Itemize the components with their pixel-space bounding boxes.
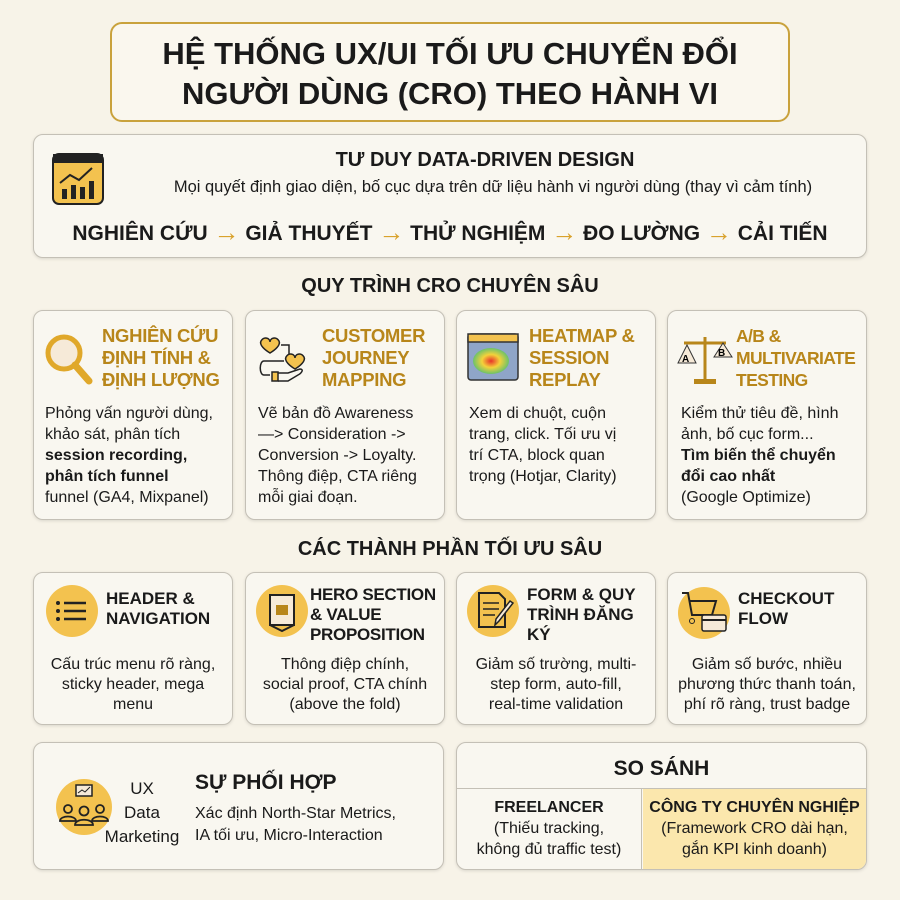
panel: nghien cuu: funnel (GA4, Mixpanel) <box>45 489 209 506</box>
panel: header navigation: menu <box>113 696 153 713</box>
panel: ab testing: đổi cao nhất <box>681 468 775 485</box>
icon: heatmap <box>467 333 519 381</box>
panel: header navigation: Cấu trúc menu rõ ràng, <box>51 656 215 673</box>
panel: heatmap: trí CTA, block quan <box>469 447 605 464</box>
panel: hero section: social proof, CTA chính <box>263 676 427 693</box>
panel: ab testing: (Google Optimize) <box>681 489 811 506</box>
cong ty: gắn KPI kinh doanh) <box>682 841 827 858</box>
panel: su phoi hop: SỰ PHỐI HỢP <box>195 771 337 794</box>
cong ty: (Framework CRO dài hạn, <box>661 820 848 837</box>
panel: nghien cuu: khảo sát, phân tích <box>45 426 180 443</box>
panel: checkout: Giảm số bước, nhiều <box>692 656 842 673</box>
panel: heatmap <box>456 310 656 520</box>
panel: nghien cuu: NGHIÊN CỨU <box>102 325 218 346</box>
panel: customer journey: —> Consideration -> <box>258 426 406 443</box>
labels <box>105 779 179 846</box>
panel: customer journey: MAPPING <box>322 369 406 390</box>
title: HỆ THỐNG UX/UI TỐI ƯU CHUYỂN ĐỔI <box>162 36 738 71</box>
panel: nghien cuu: Phỏng vấn người dùng, <box>45 405 213 422</box>
panel: su phoi hop: Xác định North-Star Metrics, <box>195 805 396 822</box>
cong ty <box>643 789 866 869</box>
panel: customer journey: Conversion -> Loyalty. <box>258 447 416 464</box>
labels: Data <box>124 803 160 822</box>
panel: ab testing: TESTING <box>736 370 808 390</box>
panel: checkout: phương thức thanh toán, <box>678 676 856 693</box>
icon: hearts <box>260 337 306 382</box>
labels: UX <box>130 779 154 798</box>
panel: nghien cuu: ĐỊNH LƯỢNG <box>102 369 220 390</box>
panel: heatmap: trọng (Hotjar, Clarity) <box>469 468 617 485</box>
panel: ab testing: Tìm biến thể chuyển <box>681 447 836 464</box>
icon: form <box>467 585 519 637</box>
title <box>110 22 790 122</box>
panel: su phoi hop <box>33 742 444 870</box>
panel: so sanh: SO SÁNH <box>614 757 709 780</box>
panel: ab testing: MULTIVARIATE <box>736 348 855 368</box>
panel: customer journey: Thông điệp, CTA riêng <box>258 468 417 485</box>
freelancer: FREELANCER <box>494 799 604 816</box>
panel: checkout: phí rõ ràng, trust badge <box>684 696 850 713</box>
panel: hero section: (above the fold) <box>289 696 401 713</box>
freelancer: không đủ traffic test) <box>477 841 621 858</box>
panel: hero section: Thông điệp chính, <box>281 656 409 673</box>
icon: menu <box>46 585 98 637</box>
heading: TƯ DUY DATA-DRIVEN DESIGN <box>336 149 634 171</box>
panel: ab testing: ảnh, bố cục form... <box>681 426 814 443</box>
panel: form: Giảm số trường, multi- <box>476 656 636 673</box>
panel: header navigation: NAVIGATION <box>106 609 210 628</box>
freelancer: (Thiếu tracking, <box>494 820 604 837</box>
panel: su phoi hop: IA tối ưu, Micro-Interaction <box>195 827 383 844</box>
panel: heatmap: trang, click. Tối ưu vị <box>469 426 616 443</box>
panel: form: TRÌNH ĐĂNG <box>527 605 634 624</box>
panel: hero section: & VALUE <box>310 605 381 624</box>
labels: Marketing <box>105 827 179 846</box>
freelancer <box>457 789 642 869</box>
flow steps: NGHIÊN CỨU → GIẢ THUYẾT → THỬ NGHIỆM → ĐO LƯỜNG → CẢI TIẾN <box>72 217 828 247</box>
panel: checkout <box>667 572 867 725</box>
icon: scale: A <box>682 354 689 365</box>
icon: chart <box>52 153 104 205</box>
panel: customer journey: JOURNEY <box>322 347 409 368</box>
cong ty: CÔNG TY CHUYÊN NGHIỆP <box>649 799 860 816</box>
panel: form: FORM & QUY <box>527 585 636 604</box>
title: NGƯỜI DÙNG (CRO) THEO HÀNH VI <box>182 76 718 111</box>
panel: ab testing: A/B & <box>736 326 781 346</box>
panel: so sanh <box>456 742 867 870</box>
heading: thanh phan: CÁC THÀNH PHẦN TỐI ƯU SÂU <box>298 538 602 560</box>
panel: hero section: HERO SECTION <box>310 585 436 604</box>
panel: hero section <box>245 572 445 725</box>
icon: scale: B <box>718 348 725 359</box>
icon: team <box>56 779 112 835</box>
panel: data-driven design <box>33 134 867 258</box>
panel: heatmap: Xem di chuột, cuộn <box>469 405 606 422</box>
icon: banner <box>256 585 308 637</box>
heading: quy trinh: QUY TRÌNH CRO CHUYÊN SÂU <box>301 275 599 297</box>
panel: customer journey: CUSTOMER <box>322 325 425 346</box>
panel: nghien cuu: ĐỊNH TÍNH & <box>102 347 211 368</box>
panel: form: KÝ <box>527 625 551 644</box>
panel: hero section: PROPOSITION <box>310 625 425 644</box>
panel: header navigation: HEADER & <box>106 589 195 608</box>
panel: ab testing <box>667 310 867 520</box>
icon: cart <box>678 587 730 639</box>
subtitle: Mọi quyết định giao diện, bố cục dựa trên dữ liệu hành vi người dùng (thay vì cảm tính) <box>174 178 812 196</box>
panel: checkout: CHECKOUT <box>738 589 834 608</box>
panel: form: step form, auto-fill, <box>490 676 622 693</box>
panel: nghien cuu <box>33 310 233 520</box>
panel: header navigation: sticky header, mega <box>62 676 204 693</box>
panel: customer journey: Vẽ bản đồ Awareness <box>258 405 413 422</box>
icon: scale <box>677 337 733 384</box>
panel: ab testing: Kiểm thử tiêu đề, hình <box>681 405 838 422</box>
panel: heatmap: REPLAY <box>529 369 601 390</box>
icon: magnifier <box>46 334 92 384</box>
panel: customer journey <box>245 310 445 520</box>
panel: form <box>456 572 656 725</box>
panel: heatmap: SESSION <box>529 347 609 368</box>
panel: header navigation <box>33 572 233 725</box>
panel: checkout: FLOW <box>738 609 788 628</box>
panel: heatmap: HEATMAP & <box>529 325 635 346</box>
panel: form: real-time validation <box>489 696 623 713</box>
panel: nghien cuu: phân tích funnel <box>45 468 169 485</box>
panel: nghien cuu: session recording, <box>45 447 187 464</box>
panel: customer journey: mỗi giai đoạn. <box>258 489 358 506</box>
